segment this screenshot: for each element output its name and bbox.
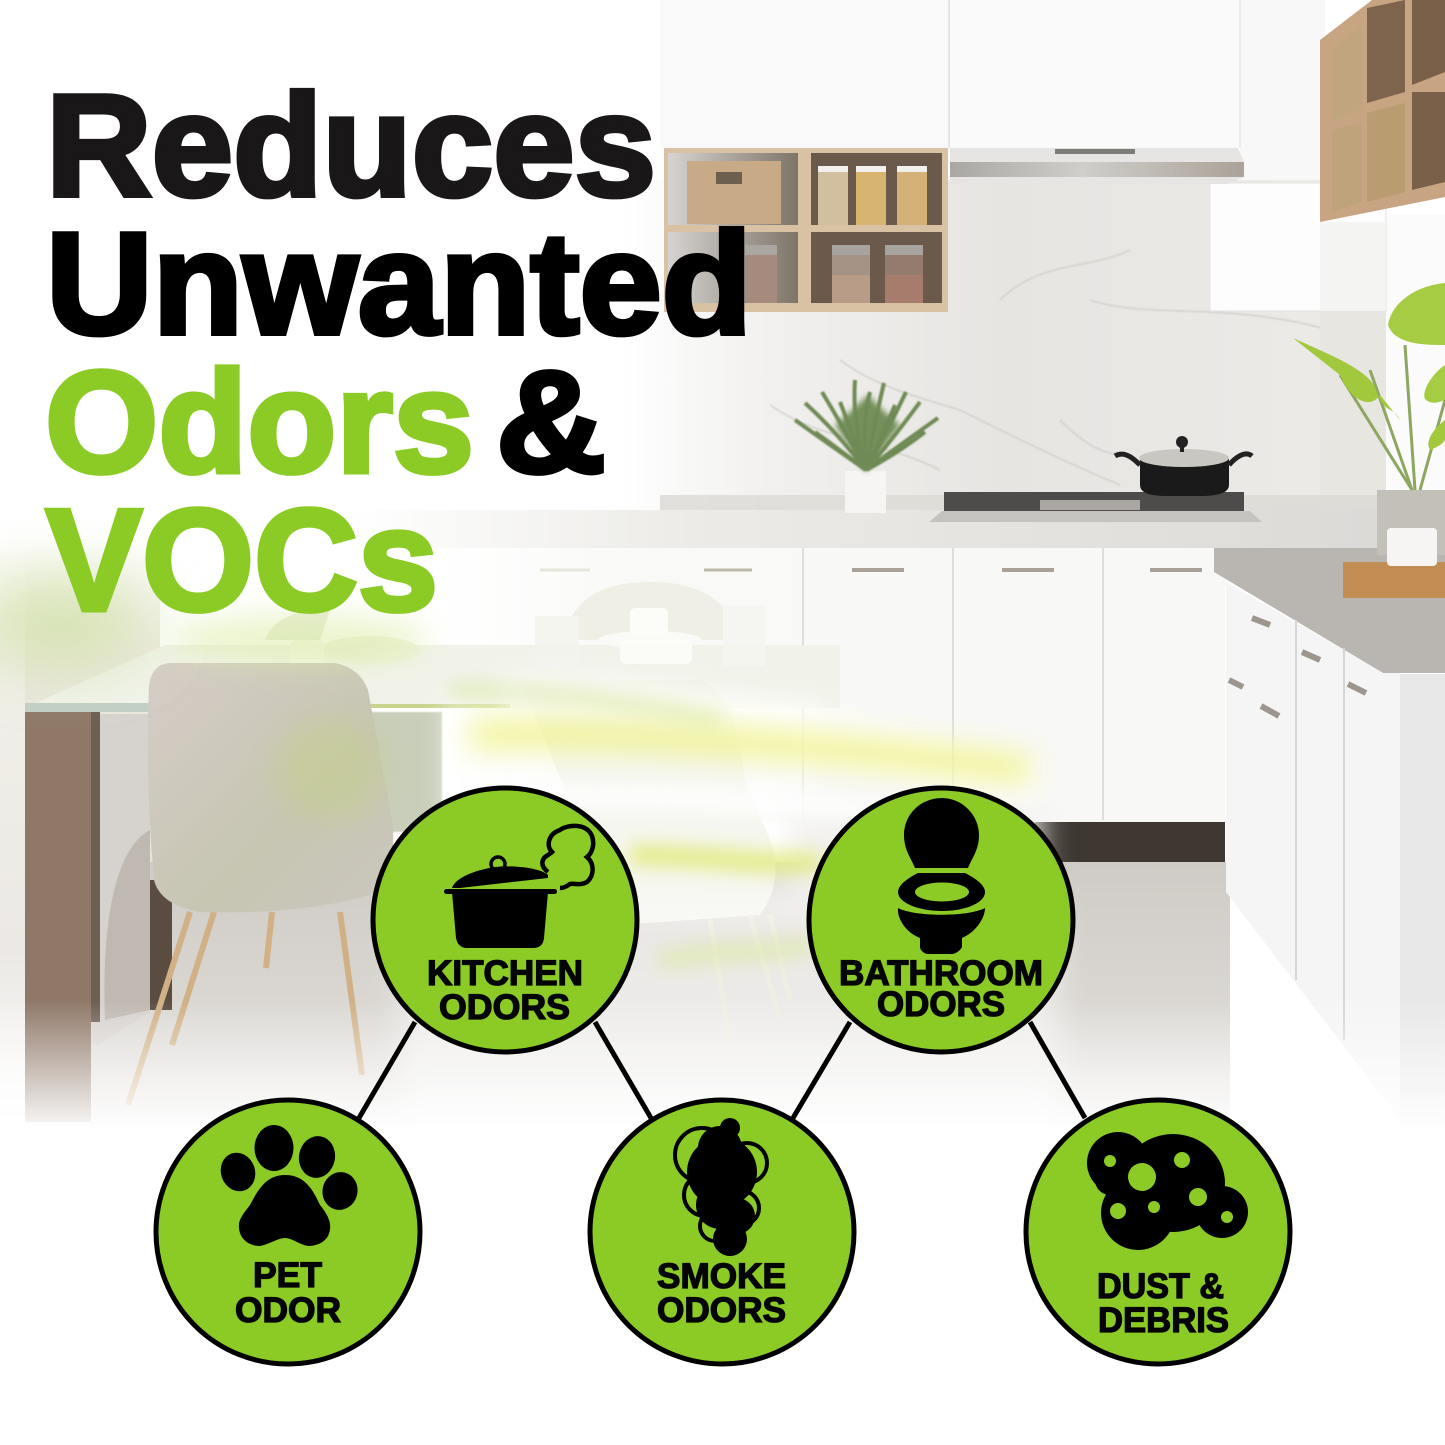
- cooking pot on stove: [1115, 436, 1252, 496]
- wooden shelf unit: [664, 148, 948, 312]
- green air swirl: [0, 575, 1040, 962]
- floor: [90, 862, 1230, 1132]
- storage jars: [745, 166, 927, 303]
- icon: paw print: [215, 1125, 362, 1246]
- title: &: [496, 341, 606, 503]
- icon: smoke cloud: [675, 1118, 767, 1256]
- white cabinet column: [1210, 183, 1386, 311]
- badge: bathroom odors: ODORS: [877, 985, 1005, 1024]
- badge: dust and debris: [1026, 1100, 1290, 1364]
- badge: dust and debris: DEBRIS: [1098, 1301, 1229, 1340]
- label: bathroom odors: BATHROOM: [839, 954, 1043, 993]
- label: dust and debris: DUST &: [1097, 1267, 1224, 1306]
- plant on counter: [795, 380, 938, 513]
- connector lines: [359, 1022, 1085, 1118]
- plant, mug and tray on island: [1293, 283, 1445, 598]
- label: smoke odors: SMOKE: [657, 1257, 786, 1296]
- badge: pet odor: ODOR: [235, 1291, 341, 1330]
- dishes on table: [265, 582, 765, 668]
- label: kitchen odors: KITCHEN: [427, 954, 583, 993]
- front chair: [128, 663, 393, 1105]
- upper wall cabinets: [660, 0, 1325, 184]
- badge: kitchen odors: ODORS: [439, 988, 570, 1027]
- woven basket: [687, 161, 781, 224]
- badge: smoke odors: [590, 1100, 854, 1364]
- range hood: [950, 148, 1244, 184]
- base cabinets: [440, 548, 1225, 862]
- title: VOCs: [46, 479, 438, 641]
- badge: bathroom odors: [809, 788, 1073, 1052]
- badge: kitchen odors: [373, 788, 637, 1052]
- far chair: [370, 680, 790, 1040]
- title: Reduces: [46, 64, 656, 226]
- icon: cooking pot with steam: [444, 826, 593, 948]
- title: Unwanted: [46, 202, 752, 364]
- title: [45, 64, 752, 641]
- badge: smoke odors: ODORS: [657, 1291, 786, 1330]
- dining table: [25, 645, 840, 1122]
- left wall: [0, 540, 160, 1130]
- counter and stove: [350, 436, 1380, 548]
- marble backsplash: [620, 180, 1386, 511]
- island: [1214, 548, 1445, 1134]
- label: pet odor: PET: [253, 1256, 322, 1295]
- right wall shelves: [1320, 0, 1445, 222]
- badge: pet odor: [156, 1100, 420, 1364]
- title: Odors: [45, 341, 474, 503]
- icon: toilet: [898, 798, 985, 954]
- white wash over dining area: [0, 540, 1445, 1445]
- right white wall: [1386, 215, 1445, 495]
- icon: dust particles: [1087, 1132, 1248, 1250]
